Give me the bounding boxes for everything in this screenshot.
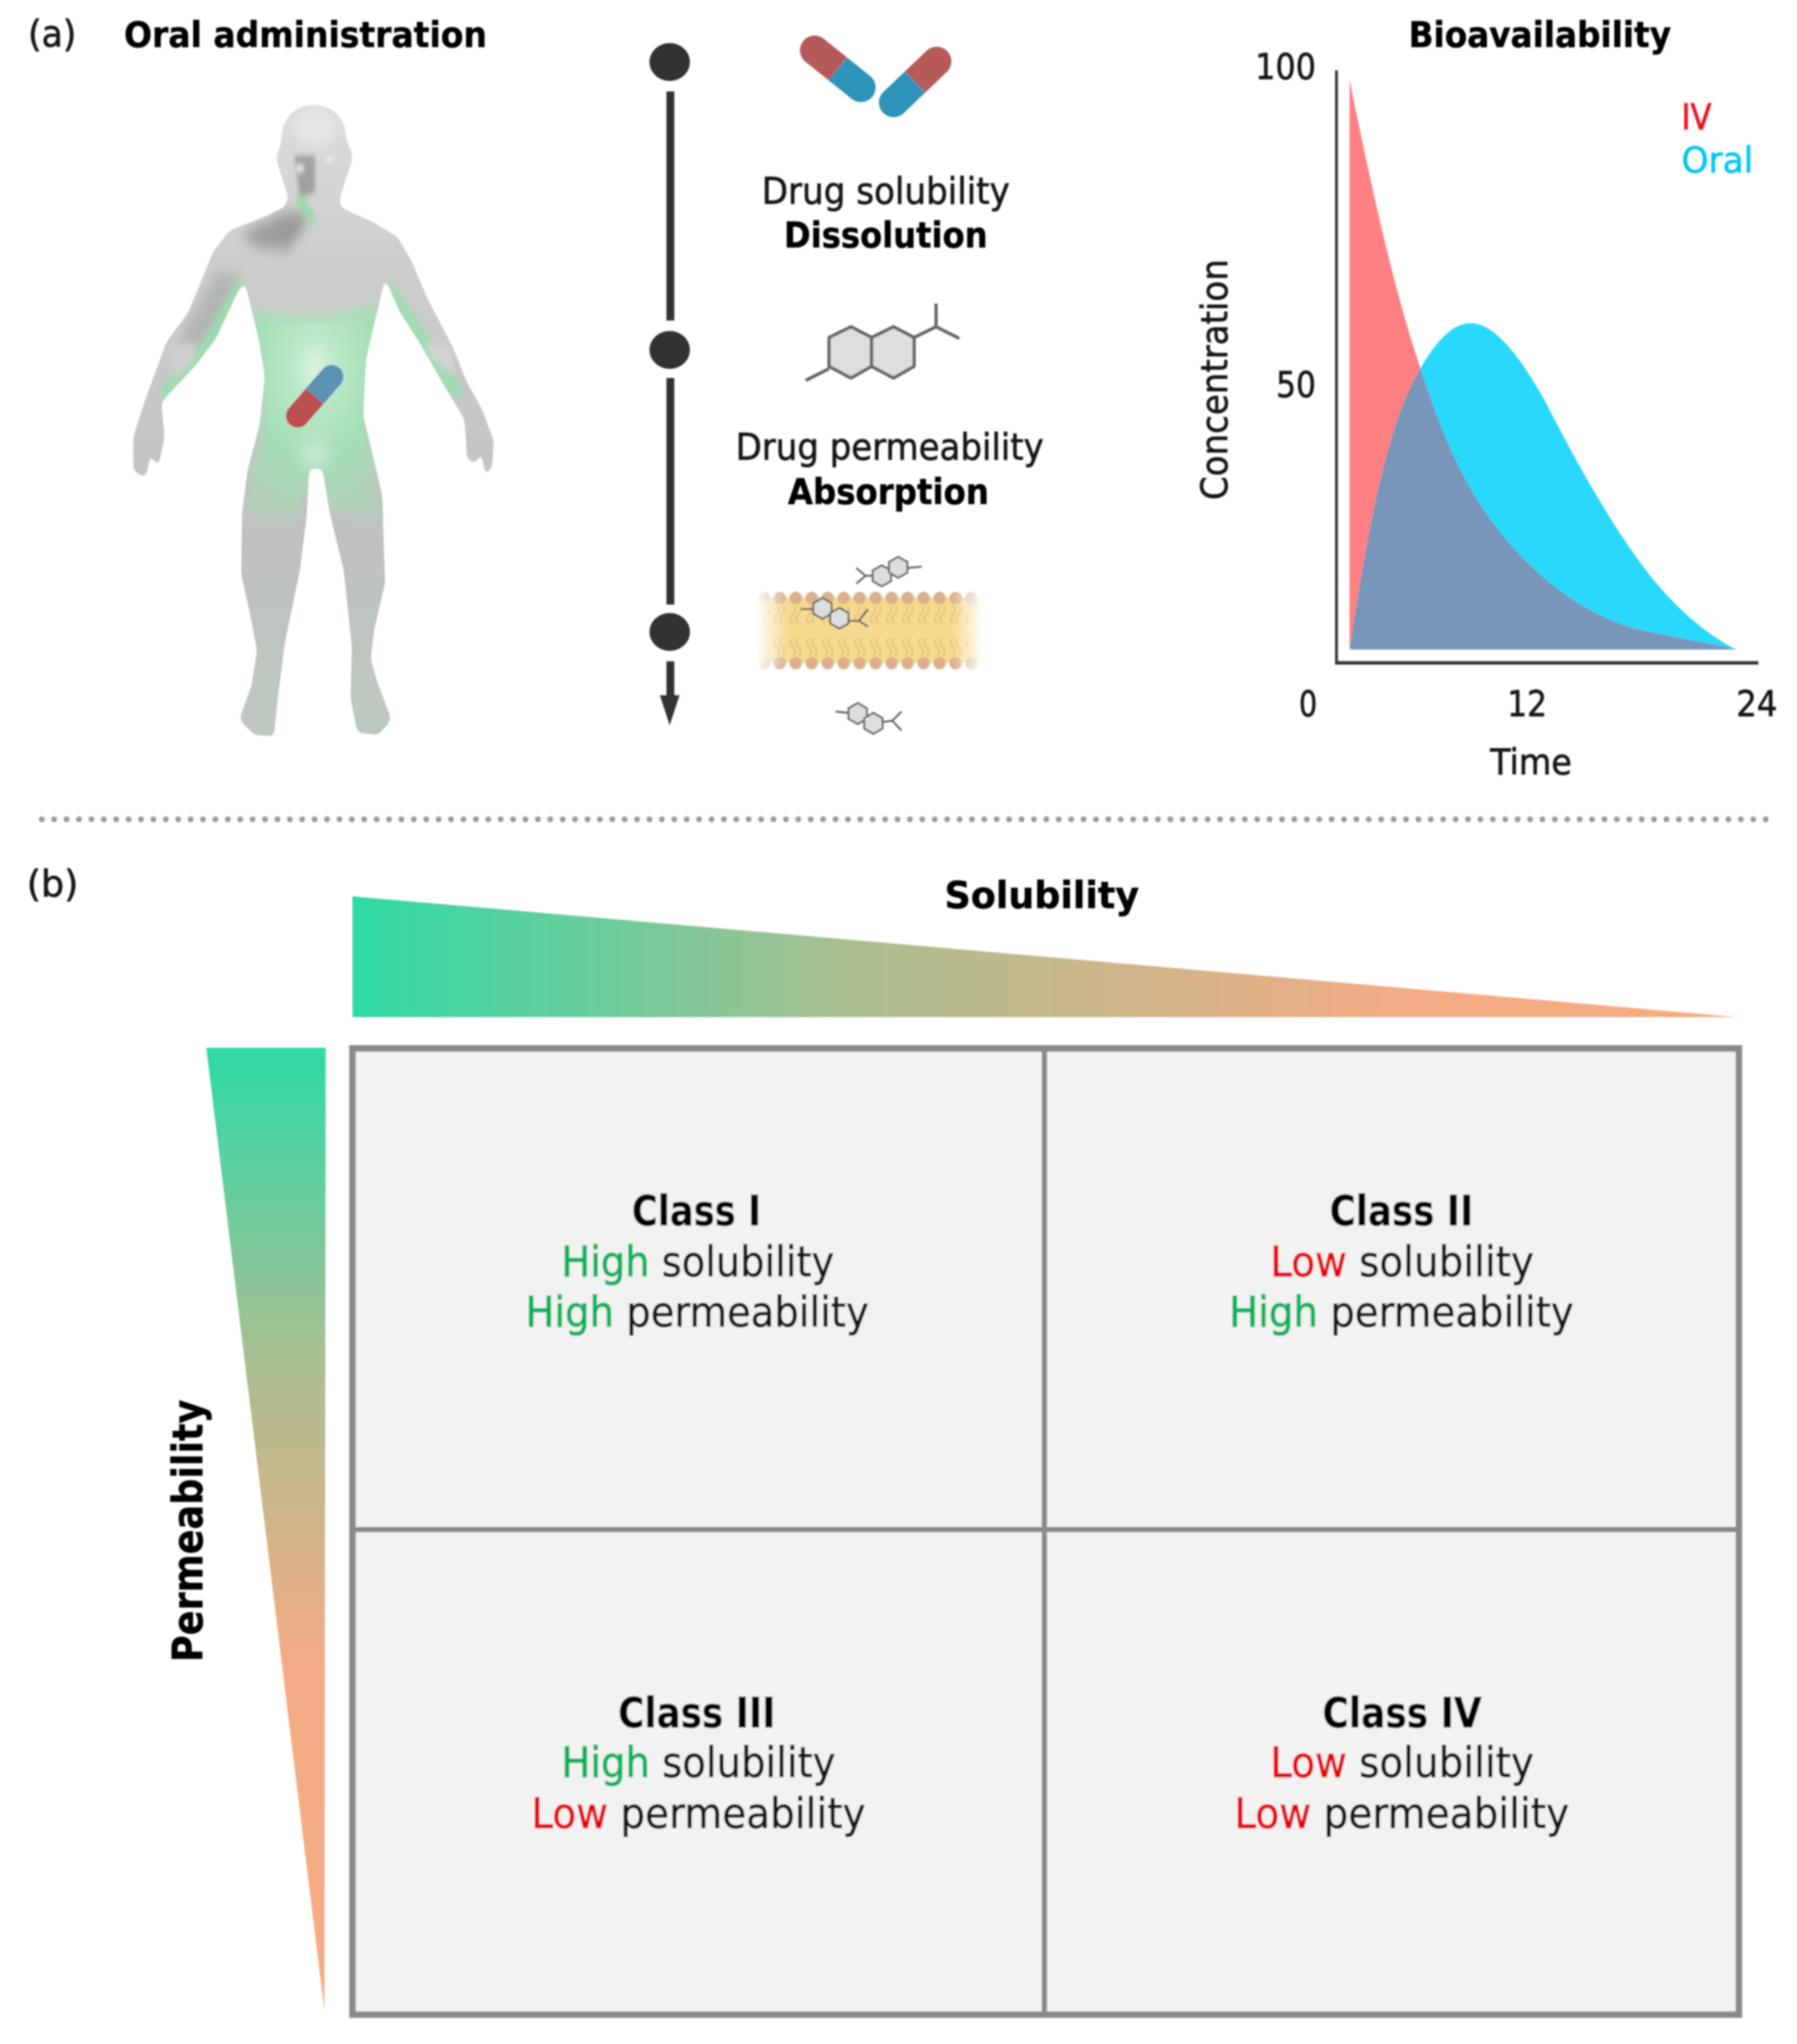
text: drug solubility, dissolution: Dissolution [784,215,988,256]
cell: class II: High permeability [1229,1289,1574,1337]
timeline with arrow [649,43,690,725]
panel label (a): (a) [28,13,76,55]
cell: class II [1229,1187,1574,1337]
y axis tick labels: 100 [1255,46,1316,87]
y axis tick labels: 0 [1299,684,1317,725]
cell: class III: High solubility [561,1739,836,1787]
text: drug solubility, dissolution: Drug solubility [762,170,1010,213]
gradient wedge: permeability [206,1048,326,2011]
text: drug permeability, absorption: Drug permeability [736,426,1044,469]
cell: class I: High solubility [561,1238,834,1287]
y axis title: Concentration [1194,259,1236,500]
text: drug permeability, absorption [736,426,1044,512]
y axis tick labels: 50 [1276,364,1316,405]
area: overlap [1349,368,1736,651]
illustration: lipid membrane [756,591,984,670]
legend: IV [1681,97,1711,138]
y axis tick labels [1255,46,1317,725]
heading: oral administration: Oral administration [124,14,487,55]
cell: class IV: Class IV [1322,1690,1482,1738]
cell: class I [525,1187,869,1337]
cell: class II: Class II [1330,1187,1473,1236]
legend [1681,97,1753,181]
cell: class III: Low permeability [531,1790,866,1838]
x axis title: Time [1490,742,1572,783]
text: drug permeability, absorption: Absorption [788,471,989,512]
cell: class I: Class I [632,1187,761,1236]
cell: class II: Low solubility [1270,1238,1534,1287]
cell: class III: Class III [618,1690,775,1738]
heading: solubility: Solubility [945,874,1139,917]
cell: class IV [1234,1690,1569,1838]
icon: molecule above membrane [856,557,922,586]
icon: drug molecule [806,304,960,381]
legend: Oral [1681,140,1753,181]
heading: permeability: Permeability [164,1400,213,1662]
area: IV curve [1350,80,1736,650]
panel label (b): (b) [27,863,78,905]
classification grid [352,1048,1739,2015]
illustration: human body with capsule [133,104,494,736]
cell: class IV: Low solubility [1270,1739,1534,1787]
cell: class IV: Low permeability [1234,1790,1569,1838]
icon: capsule in abdomen [286,365,343,428]
x axis tick labels: 24 [1736,684,1777,725]
icon: molecule below membrane [836,703,901,734]
cell: class I: High permeability [525,1289,869,1337]
axes [1336,71,1758,663]
heading: bioavailability: Bioavailability [1409,14,1671,55]
icon: molecule within membrane [801,598,868,629]
chart: concentration vs time [1194,46,1777,783]
x axis tick labels: 12 [1507,684,1547,725]
area: oral curve [1350,323,1736,650]
cell: class III [531,1690,866,1838]
text: drug solubility, dissolution [762,170,1010,256]
gradient wedge: solubility [352,896,1738,1017]
icon: two capsules [800,35,952,118]
x axis tick labels [1507,684,1777,725]
